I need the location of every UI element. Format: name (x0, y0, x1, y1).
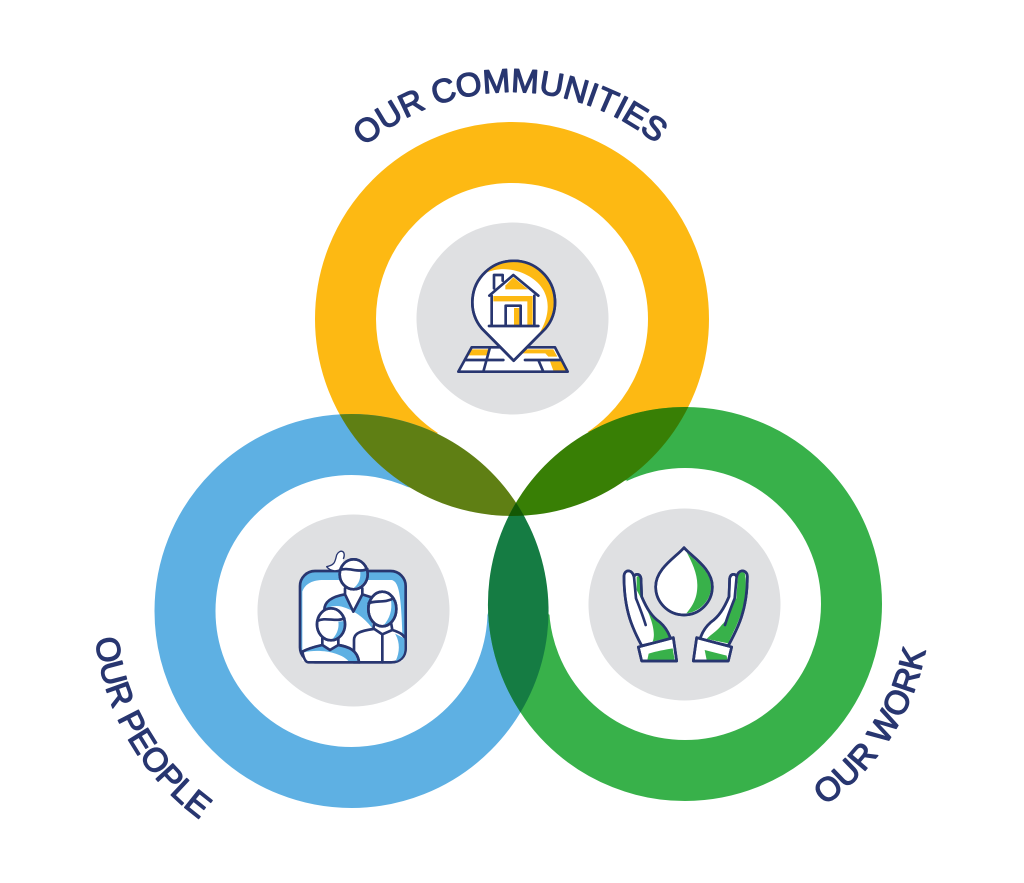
overlap: people and work (488, 503, 549, 712)
boy left (302, 608, 359, 662)
water drop (656, 548, 712, 615)
overlap: communities and work (509, 407, 688, 516)
heading: our communities: OUR COMMUNITIES (354, 68, 667, 142)
central white knock-out between the rings (407, 432, 627, 615)
frame (300, 571, 406, 662)
ring: our work (518, 438, 852, 770)
ring: our communities (346, 152, 678, 486)
icon backdrop: people (258, 514, 450, 706)
left hand (624, 571, 677, 661)
man right (354, 592, 406, 662)
heading: our work: OUR WORK (816, 646, 926, 802)
overlap: communities and people (340, 414, 524, 516)
icon backdrop: work (588, 508, 780, 700)
heading: our people: OUR PEOPLE (96, 638, 213, 820)
woman (324, 551, 372, 628)
icon: house location pin on map (458, 261, 568, 372)
pin (472, 261, 555, 361)
map (458, 347, 568, 372)
house (489, 275, 538, 326)
overlap: all three (509, 503, 524, 516)
icon backdrop: communities (416, 222, 608, 414)
icon: three people portrait (300, 551, 406, 662)
right hand (693, 571, 747, 661)
ring: our people (185, 444, 518, 778)
icon: hands holding water drop (624, 548, 747, 661)
